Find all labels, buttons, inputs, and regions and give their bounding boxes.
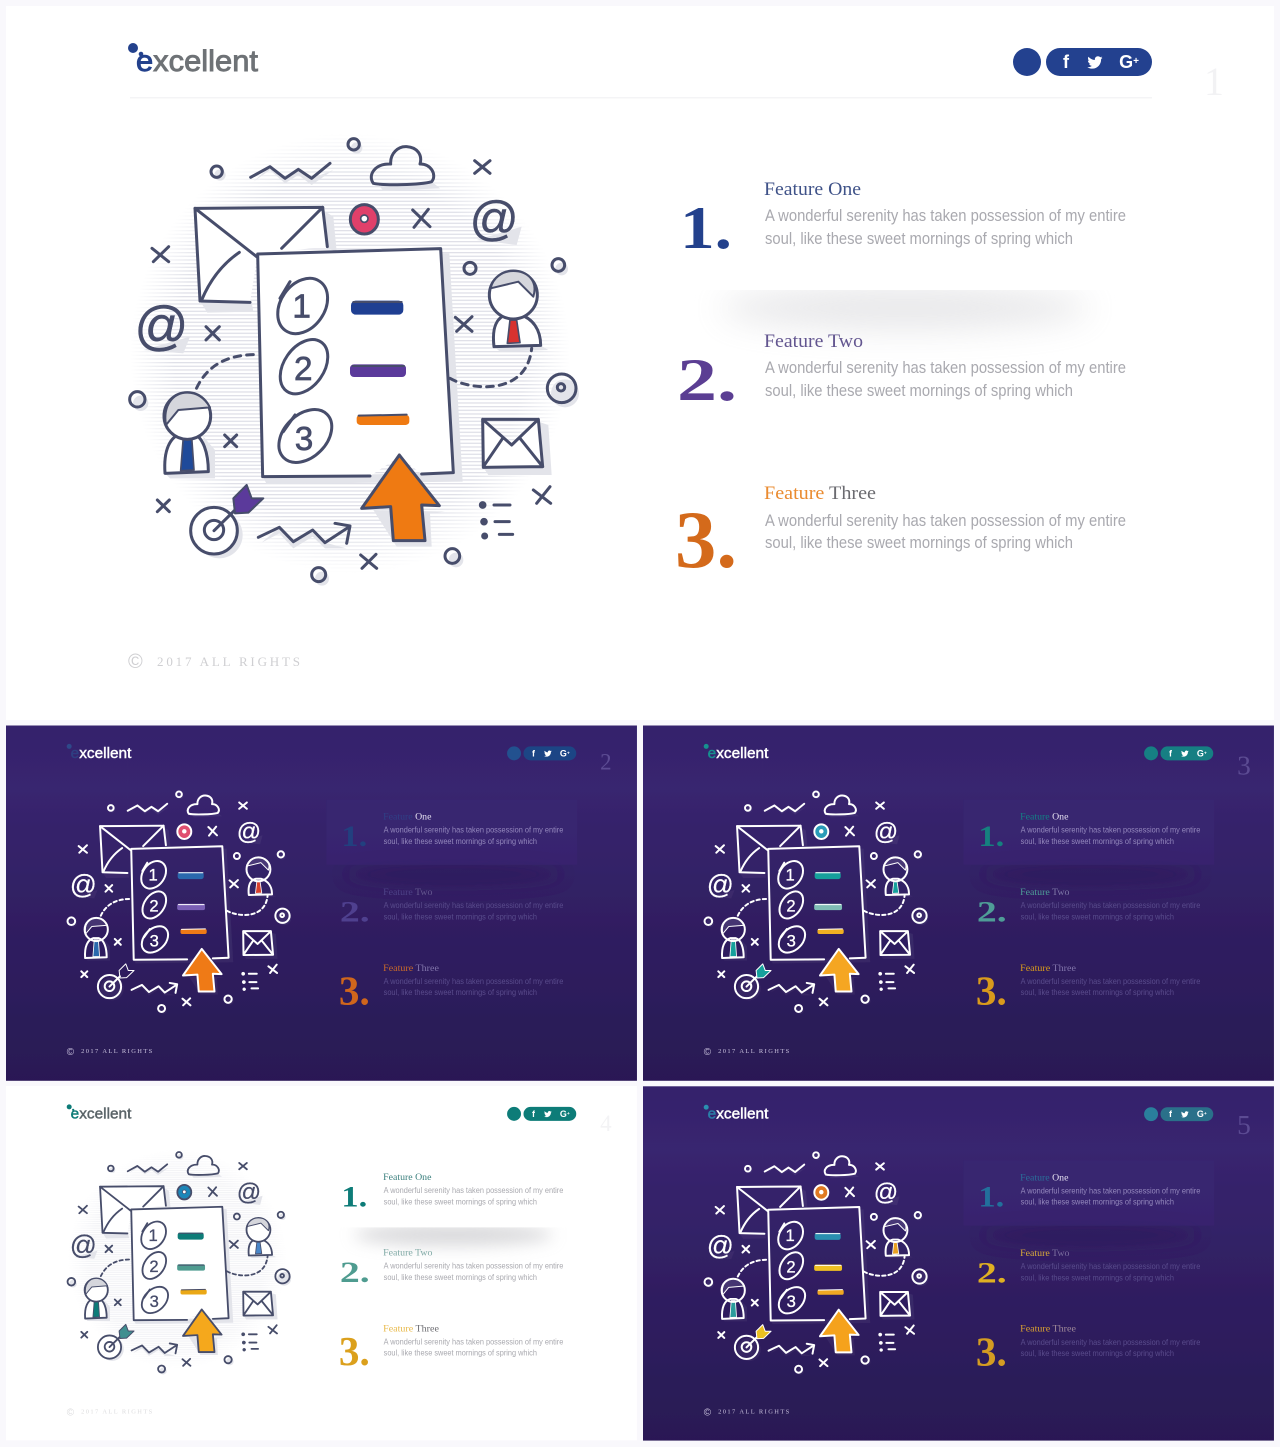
illustration <box>128 137 579 586</box>
at signs: @ <box>707 1230 734 1260</box>
feature 3: 3. <box>976 969 1007 1014</box>
feature card <box>963 1160 1214 1226</box>
page number: 5 <box>1237 1110 1251 1140</box>
copyright: © <box>704 1047 712 1058</box>
illustration <box>66 1151 291 1374</box>
feature 2: Feature Two <box>383 888 433 898</box>
feature 2 <box>977 888 1201 929</box>
at signs: @ <box>70 870 97 900</box>
panel: dark slide 5 <box>643 1086 1274 1441</box>
feature 3: soul, like these sweet mornings of spring which <box>765 533 1073 552</box>
social buttons: + <box>1204 751 1207 756</box>
feature 1: soul, like these sweet mornings of spring which <box>1021 836 1174 846</box>
feature 3: Feature Three <box>383 964 439 974</box>
list numbers <box>149 1226 159 1311</box>
copyright <box>67 1407 154 1418</box>
list numbers: 2 <box>149 897 159 916</box>
social buttons <box>1144 1107 1213 1121</box>
logo: excellent <box>136 45 259 78</box>
copyright: © <box>128 651 143 673</box>
feature 1: soul, like these sweet mornings of spring which <box>765 229 1073 248</box>
page number: 4 <box>600 1111 612 1136</box>
at signs: @ <box>470 192 519 246</box>
feature card shadow <box>720 286 1090 330</box>
feature 2 <box>977 1249 1201 1289</box>
feature 1: soul, like these sweet mornings of spring which <box>1021 1197 1174 1207</box>
feature 3: 3. <box>339 969 370 1014</box>
social buttons: + <box>1133 56 1139 67</box>
feature 3: soul, like these sweet mornings of spring which <box>384 987 537 997</box>
list numbers: 3 <box>787 931 796 950</box>
feature 1: A wonderful serenity has taken possession of my entire <box>1021 1185 1201 1195</box>
at signs <box>70 818 261 900</box>
feature 3: Feature Three <box>764 483 876 504</box>
list numbers: 2 <box>786 1257 796 1276</box>
feature 3: 3. <box>976 1329 1007 1374</box>
feature 3: soul, like these sweet mornings of spring which <box>1021 987 1174 997</box>
feature 3: A wonderful serenity has taken possession of my entire <box>1021 1337 1201 1347</box>
feature 2: Feature Two <box>1020 888 1070 898</box>
feature 1 <box>680 179 1126 261</box>
copyright <box>704 1047 791 1058</box>
feature 1 <box>978 1173 1201 1214</box>
feature 1: soul, like these sweet mornings of spring which <box>384 836 537 846</box>
feature 3: A wonderful serenity has taken possession of my entire <box>765 511 1126 530</box>
feature 2 <box>340 1249 564 1289</box>
feature 1 <box>341 813 564 853</box>
copyright: © <box>67 1407 75 1418</box>
list numbers: 1 <box>786 865 795 884</box>
at signs: @ <box>707 870 734 900</box>
feature 1: 1. <box>341 820 367 853</box>
feature 2: soul, like these sweet mornings of spring which <box>384 1272 537 1282</box>
illustration <box>705 1152 928 1375</box>
social buttons: G <box>560 748 567 758</box>
feature 3: A wonderful serenity has taken possession of my entire <box>384 1337 564 1347</box>
at signs: @ <box>874 1179 898 1206</box>
feature 1: A wonderful serenity has taken possession of my entire <box>384 824 564 834</box>
feature 1: A wonderful serenity has taken possession of my entire <box>1021 824 1201 834</box>
feature 1: 1. <box>978 820 1004 853</box>
feature 1 <box>341 1173 564 1213</box>
at signs <box>707 818 898 900</box>
feature 2: soul, like these sweet mornings of spring which <box>1021 912 1174 922</box>
feature 1: 1. <box>341 1180 367 1213</box>
feature 3: 3. <box>339 1329 370 1374</box>
feature 2: A wonderful serenity has taken possession of my entire <box>1021 900 1201 910</box>
feature 2 <box>677 331 1126 413</box>
feature 3 <box>976 964 1201 1014</box>
list numbers: 2 <box>786 897 796 916</box>
feature 3 <box>675 483 1126 585</box>
at signs <box>707 1179 898 1260</box>
feature 2: 2. <box>677 347 737 413</box>
list numbers: 1 <box>786 1226 795 1245</box>
feature 3: Feature Three <box>1020 964 1076 974</box>
list numbers <box>786 865 796 950</box>
feature card <box>963 800 1214 865</box>
social buttons <box>1013 48 1152 76</box>
feature 3 <box>976 1325 1201 1374</box>
feature 2: Feature Two <box>383 1249 433 1259</box>
at signs: @ <box>237 1179 261 1206</box>
copyright: 2017 ALL RIGHTS <box>718 1048 791 1055</box>
feature 2: A wonderful serenity has taken possession of my entire <box>384 900 564 910</box>
list numbers: 1 <box>149 1226 158 1245</box>
panel: white slide 4 <box>66 1104 576 1416</box>
feature card shadow <box>981 1224 1200 1246</box>
page number: 1 <box>1204 59 1224 104</box>
list numbers: 1 <box>149 865 158 884</box>
feature card <box>326 800 577 865</box>
copyright <box>67 1047 154 1058</box>
page number: 2 <box>600 749 612 774</box>
at signs <box>70 1179 261 1260</box>
panel: dark slide 2 <box>6 726 637 1081</box>
copyright: 2017 ALL RIGHTS <box>157 654 303 669</box>
feature 2: soul, like these sweet mornings of spring which <box>765 381 1073 400</box>
panel: large white slide 1 <box>128 43 1152 668</box>
social buttons <box>507 746 576 760</box>
social buttons <box>1144 746 1213 760</box>
feature 2: soul, like these sweet mornings of spring which <box>384 912 537 922</box>
social buttons: G <box>1197 748 1204 758</box>
list numbers: 1 <box>292 288 311 325</box>
list numbers: 3 <box>150 931 159 950</box>
list numbers: 2 <box>294 351 313 388</box>
page number: 3 <box>1237 750 1251 780</box>
feature 1: A wonderful serenity has taken possession of my entire <box>765 206 1126 225</box>
list numbers <box>292 288 313 458</box>
copyright: © <box>704 1408 712 1419</box>
feature 2: 2. <box>977 896 1007 929</box>
feature card shadow <box>344 863 563 885</box>
social buttons <box>507 1107 576 1121</box>
illustration <box>68 792 291 1014</box>
list numbers <box>786 1226 796 1311</box>
feature 1: Feature One <box>764 179 861 200</box>
feature 2: Feature Two <box>1020 1249 1070 1259</box>
social buttons: f <box>1169 748 1172 758</box>
panel: dark slide 3 <box>643 726 1274 1081</box>
feature 2: 2. <box>340 1256 370 1289</box>
feature 2: 2. <box>977 1256 1007 1289</box>
social buttons: + <box>1204 1112 1207 1117</box>
feature 2: soul, like these sweet mornings of spring which <box>1021 1272 1174 1282</box>
social buttons: G <box>1119 52 1133 72</box>
copyright <box>704 1408 791 1419</box>
feature 3: 3. <box>675 494 737 585</box>
social buttons: f <box>532 1109 535 1119</box>
feature 3: A wonderful serenity has taken possession of my entire <box>384 976 564 986</box>
feature 3: soul, like these sweet mornings of spring which <box>1021 1348 1174 1358</box>
copyright: © <box>67 1047 75 1058</box>
at signs <box>134 192 519 356</box>
feature card <box>640 150 1170 290</box>
feature 2: A wonderful serenity has taken possession of my entire <box>765 358 1126 377</box>
social buttons: f <box>1169 1109 1172 1119</box>
feature 3: soul, like these sweet mornings of spring which <box>384 1348 537 1358</box>
feature card <box>321 1158 585 1227</box>
social buttons: + <box>567 1112 570 1117</box>
feature 2: Feature Two <box>764 331 863 352</box>
feature 3: Feature Three <box>1020 1325 1076 1335</box>
copyright: 2017 ALL RIGHTS <box>81 1408 154 1415</box>
feature 2: A wonderful serenity has taken possession of my entire <box>1021 1261 1201 1271</box>
at signs: @ <box>237 818 261 845</box>
feature card shadow <box>981 863 1200 885</box>
social buttons: f <box>532 748 535 758</box>
feature 2 <box>340 888 564 929</box>
feature 3 <box>339 964 564 1014</box>
feature 3: Feature Three <box>383 1324 439 1334</box>
social buttons: + <box>567 751 570 756</box>
logo: excellent <box>71 1105 132 1122</box>
feature 1: Feature One <box>383 1173 431 1183</box>
social buttons: G <box>560 1109 567 1119</box>
at signs: @ <box>874 818 898 845</box>
feature 1: soul, like these sweet mornings of spring which <box>384 1196 537 1206</box>
feature 1 <box>978 813 1201 853</box>
feature 1: 1. <box>680 195 732 261</box>
illustration <box>705 792 928 1014</box>
feature 1: Feature One <box>1020 813 1068 823</box>
feature 1: A wonderful serenity has taken possession of my entire <box>384 1185 564 1195</box>
copyright: 2017 ALL RIGHTS <box>718 1409 791 1416</box>
list numbers <box>149 865 159 950</box>
logo: excellent <box>708 1106 769 1123</box>
copyright <box>128 651 303 673</box>
at signs: @ <box>70 1230 97 1260</box>
feature card shadow <box>354 1224 553 1246</box>
logo: excellent <box>708 745 769 762</box>
feature 1: Feature One <box>383 813 431 823</box>
social buttons: G <box>1197 1109 1204 1119</box>
feature 3 <box>339 1324 564 1374</box>
at signs: @ <box>134 297 188 356</box>
feature 3: A wonderful serenity has taken possession of my entire <box>1021 976 1201 986</box>
feature 1: Feature One <box>1020 1173 1068 1183</box>
feature 2: 2. <box>340 896 370 929</box>
feature 1: 1. <box>978 1181 1004 1214</box>
list numbers: 3 <box>295 421 313 458</box>
list numbers: 3 <box>787 1292 796 1311</box>
list numbers: 2 <box>149 1257 159 1276</box>
list numbers: 3 <box>150 1292 159 1311</box>
logo: excellent <box>71 745 132 762</box>
social buttons: f <box>1063 52 1070 72</box>
feature 2: A wonderful serenity has taken possession of my entire <box>384 1261 564 1271</box>
copyright: 2017 ALL RIGHTS <box>81 1048 154 1055</box>
